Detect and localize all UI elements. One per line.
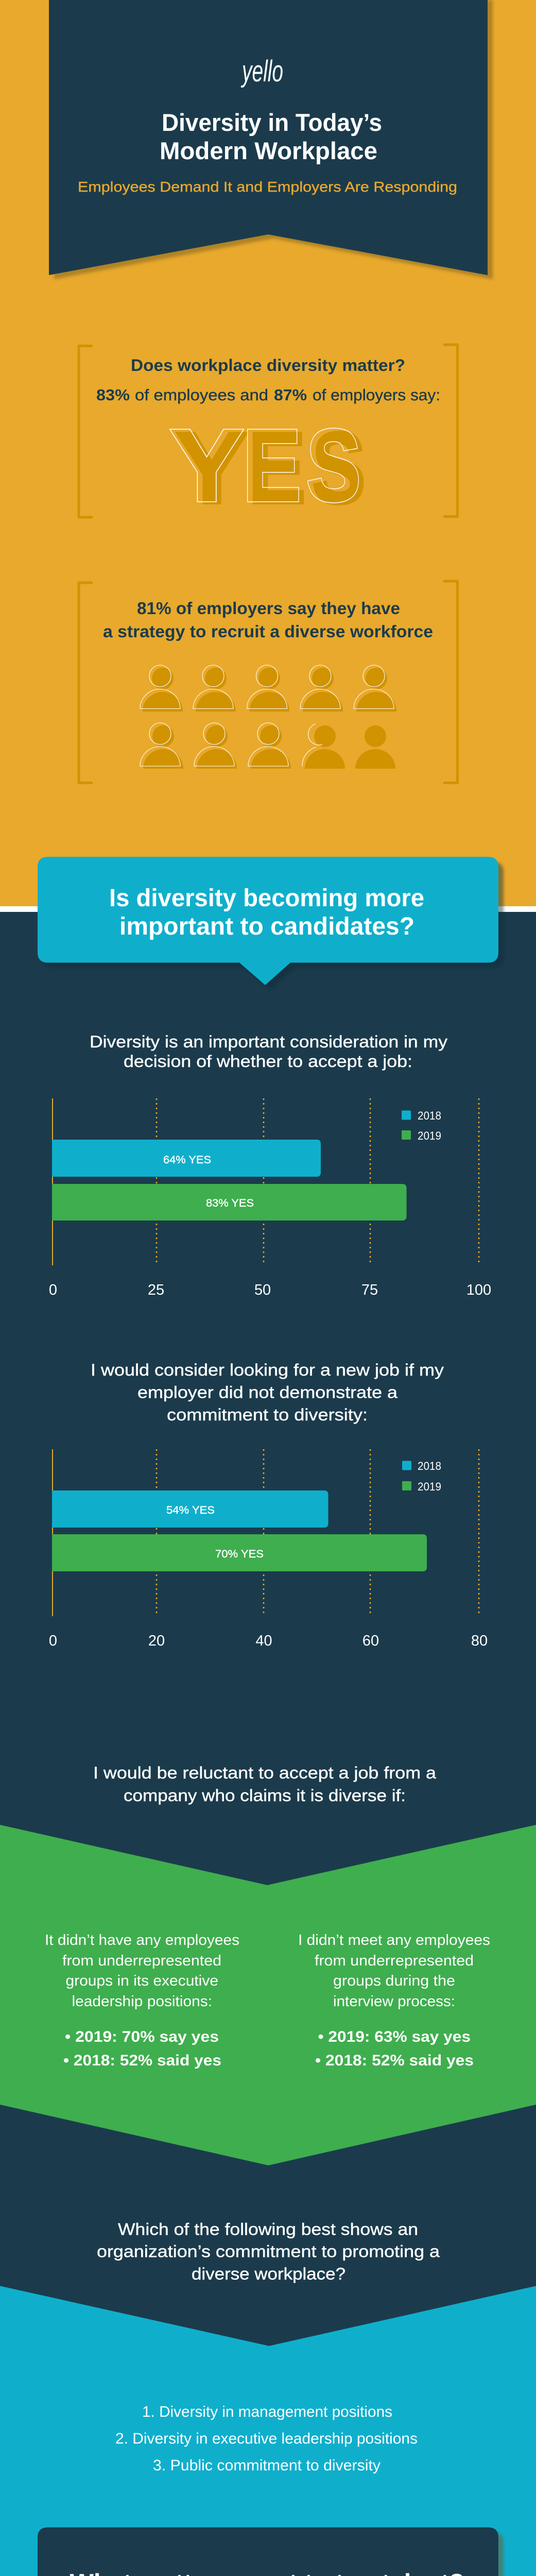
- title: Modern Workplace: [160, 137, 377, 164]
- question: diversity consideration: [90, 1032, 447, 1071]
- question: reluctant to accept: I would be reluctant to accept a job from a: [93, 1764, 436, 1782]
- bar labels: 70% YES: [215, 1548, 264, 1560]
- panel: teal ranked list: 2. Diversity in executive leadership positions: [115, 2430, 418, 2447]
- bar labels: 64% YES: [163, 1154, 211, 1166]
- axis labels: 40: [255, 1633, 272, 1649]
- left stat: • 2018: 52% said yes: [63, 2052, 221, 2069]
- bar: 2019: [52, 1534, 427, 1571]
- title: [160, 109, 382, 164]
- strategy text: a strategy to recruit a diverse workforce: [103, 622, 433, 641]
- axis labels: 60: [362, 1633, 379, 1649]
- subtitle: Employees Demand It and Employers Are Responding: [78, 179, 457, 195]
- panel: teal ranked list: 3. Public commitment to diversity: [153, 2457, 381, 2474]
- legend: 2019: [418, 1129, 441, 1142]
- bar labels: 83% YES: [206, 1197, 254, 1209]
- bar chart: important consideration 2018 vs 2019: [49, 1098, 491, 1298]
- right stat: [298, 1932, 490, 2069]
- bar: 2018: [52, 1490, 328, 1528]
- axis labels: [49, 1282, 491, 1298]
- axis labels: 75: [361, 1282, 378, 1298]
- legend: 2018: [418, 1109, 441, 1122]
- question: organization's commitment: diverse workplace?: [192, 2265, 345, 2283]
- heading callout: Is diversity becoming more important: [38, 857, 504, 990]
- question: organization's commitment: Which of the following best shows an: [118, 2220, 418, 2239]
- employee and employer stat: 83%: [96, 386, 130, 404]
- logo: yello: yello: [240, 55, 283, 88]
- question: reluctant to accept: company who claims it is diverse if:: [124, 1786, 406, 1805]
- legend: [402, 1109, 441, 1142]
- employee and employer stat: of employees and: [135, 386, 268, 404]
- question: look for a new job: commitment to diversity:: [167, 1405, 368, 1424]
- axis labels: 50: [254, 1282, 271, 1298]
- question: look for a new job: employer did not demonstrate a: [137, 1383, 397, 1401]
- axis labels: 25: [148, 1282, 164, 1298]
- header banner: [49, 0, 493, 279]
- employee and employer stat: of employers say:: [313, 386, 440, 404]
- right stat: groups during the: [333, 1973, 455, 1989]
- left stat: It didn’t have any employees: [45, 1932, 239, 1948]
- right stat: interview process:: [333, 1993, 455, 2010]
- YES outlined word: S: [312, 412, 366, 524]
- question: reluctant to accept: [93, 1764, 436, 1805]
- bar labels: 54% YES: [166, 1504, 215, 1516]
- bar labels: [166, 1504, 264, 1560]
- bar: 2018: [52, 1140, 321, 1177]
- right stat: I didn’t meet any employees: [298, 1932, 490, 1948]
- heading callout: What matters most: [38, 2528, 504, 2576]
- panel: teal ranked list: 1. Diversity in management positions: [142, 2403, 392, 2420]
- axis labels: 80: [471, 1633, 488, 1649]
- YES outlined word: Y: [176, 412, 248, 524]
- legend: 2018: [418, 1460, 441, 1472]
- employee and employer stat: 87%: [274, 386, 307, 404]
- left stat: from underrepresented: [62, 1953, 221, 1969]
- left stat: [45, 1932, 239, 2069]
- axis labels: 0: [49, 1282, 57, 1298]
- bar labels: [163, 1154, 254, 1209]
- axis labels: [49, 1633, 488, 1649]
- legend: 2019: [418, 1480, 441, 1493]
- title: Diversity in Today’s: [162, 109, 382, 136]
- question heading: Does workplace diversity matter?: [131, 356, 405, 375]
- employee and employer stat: [96, 386, 440, 404]
- panel: green chevron with two stats: [0, 1825, 536, 2165]
- strategy text: [103, 599, 433, 641]
- left stat: groups in its executive: [66, 1973, 218, 1989]
- right stat: • 2018: 52% said yes: [315, 2052, 474, 2069]
- YES outlined word: E: [248, 412, 306, 524]
- heading callout: Is diversity becoming more important: important to candidates?: [119, 913, 414, 940]
- question: diversity consideration: Diversity is an important consideration in my: [90, 1032, 447, 1051]
- axis labels: 20: [148, 1633, 165, 1649]
- icon: people grid, 8 of 10 outlined: [140, 665, 396, 769]
- right stat: from underrepresented: [315, 1953, 474, 1969]
- question: diversity consideration: decision of whether to accept a job:: [124, 1052, 412, 1071]
- left stat: • 2019: 70% say yes: [65, 2028, 219, 2045]
- panel: 81% recruiting strategy: [79, 581, 457, 783]
- question: look for a new job: I would consider looking for a new job if my: [91, 1361, 444, 1379]
- right stat: • 2019: 63% say yes: [318, 2028, 471, 2045]
- question: organization's commitment: organization’s commitment to promoting a: [97, 2242, 440, 2261]
- bar: 2019: [52, 1184, 407, 1221]
- axis labels: 0: [49, 1633, 57, 1649]
- strategy text: 81% of employers say they have: [137, 599, 400, 618]
- bar chart: new job 2018 vs 2019: [49, 1449, 488, 1649]
- panel: does diversity matter: [79, 345, 457, 524]
- question: look for a new job: [91, 1361, 444, 1424]
- heading callout: Is diversity becoming more important: Is diversity becoming more: [109, 885, 424, 912]
- YES outlined word: [169, 428, 364, 505]
- panel: teal ranked list: [0, 2286, 536, 2576]
- axis labels: 100: [466, 1282, 491, 1298]
- question: organization's commitment: [97, 2220, 440, 2283]
- left stat: leadership positions:: [72, 1993, 212, 2010]
- legend: [402, 1460, 441, 1493]
